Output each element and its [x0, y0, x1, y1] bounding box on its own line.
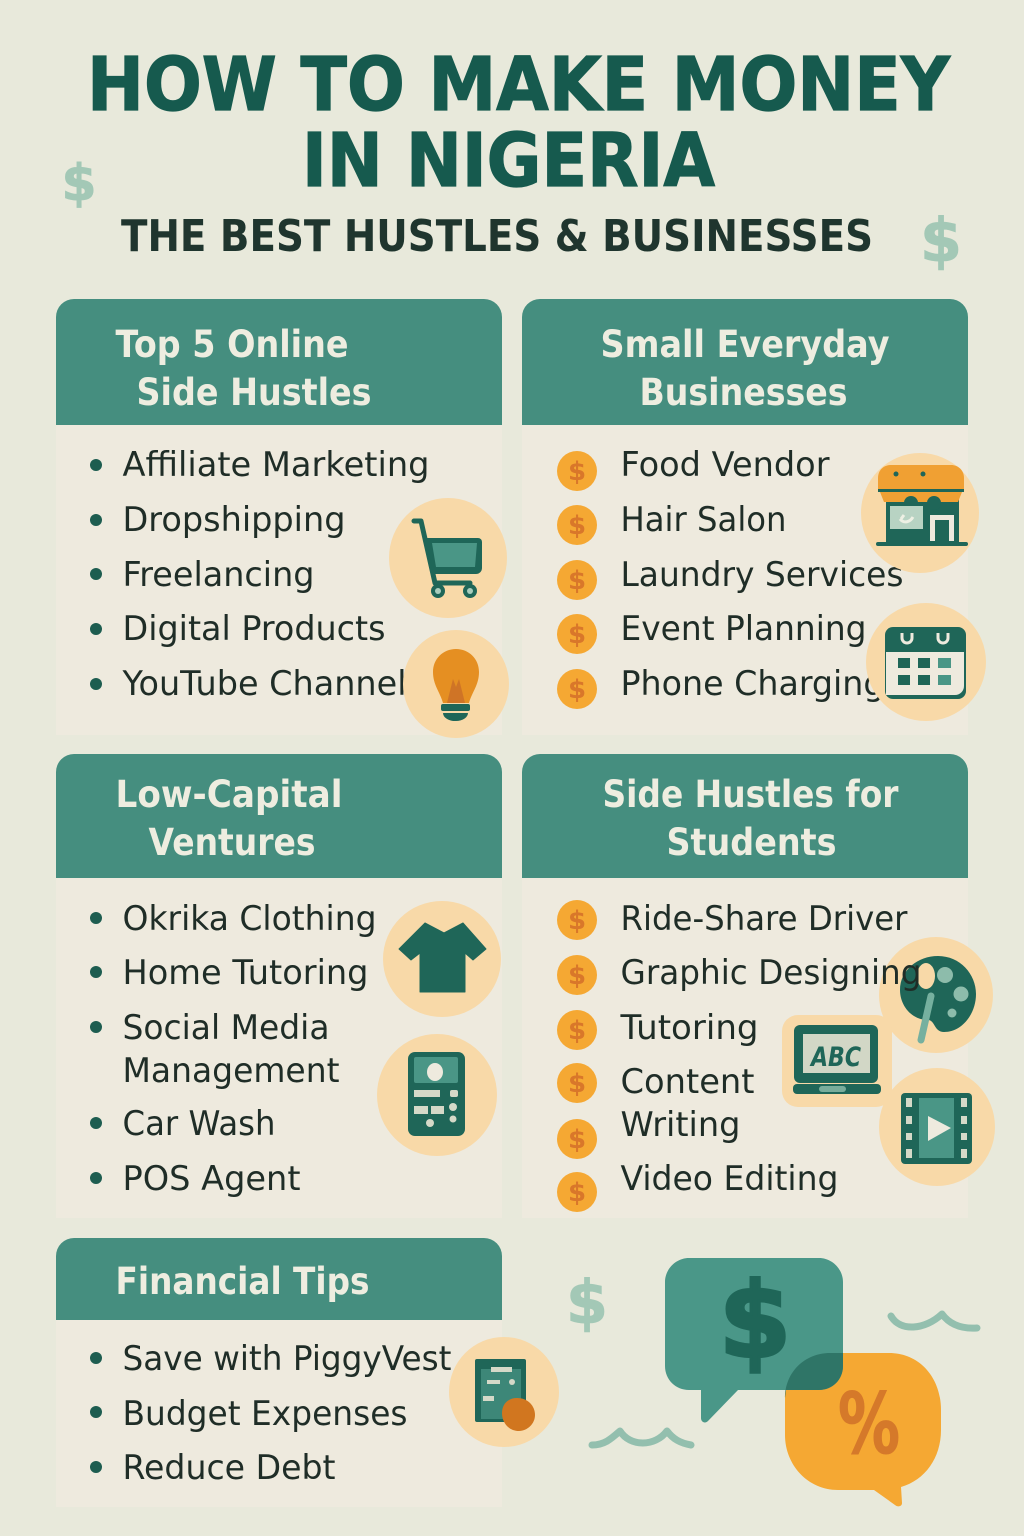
list: low-capital ventures [90, 899, 376, 1199]
decorative dollar sign right: $ [920, 206, 962, 276]
speech bubble: percent: % [838, 1375, 900, 1473]
panel: low-capital ventures [56, 754, 502, 1218]
list: student side hustles: Content [620, 1062, 754, 1102]
list: student side hustles: $ [568, 1016, 586, 1046]
speech bubble: percent [785, 1353, 941, 1506]
heading: small everyday businesses: Small Everyday [600, 323, 890, 366]
heading: side hustles for students: Side Hustles for [602, 773, 899, 816]
speech bubble: dollar [665, 1258, 843, 1422]
list: low-capital ventures: Management [122, 1051, 340, 1091]
heading: side hustles for students: Students [666, 821, 836, 864]
panel: small everyday businesses [522, 299, 986, 735]
heading: low-capital ventures: Ventures [148, 821, 316, 864]
list: student side hustles: $ [568, 906, 586, 936]
icon: POS device [377, 1034, 497, 1156]
icon: budget sheet and coin [449, 1337, 559, 1447]
heading: top 5 online side hustles [56, 299, 502, 425]
list: student side hustles: $ [568, 961, 586, 991]
list: everyday businesses: $ [568, 566, 586, 596]
icon: film play [879, 1068, 995, 1186]
heading: small everyday businesses [522, 299, 968, 425]
decorative dollar sign bottom: $ [566, 1268, 608, 1338]
icon: t-shirt [383, 901, 501, 1017]
list: online side hustles: Freelancing [122, 555, 314, 595]
list: online side hustles: Affiliate Marketing [122, 445, 430, 485]
heading: side hustles for students [522, 754, 968, 878]
speech bubble: dollar: $ [719, 1260, 791, 1382]
list: everyday businesses: $ [568, 457, 586, 487]
panel: side hustles for students [522, 754, 995, 1218]
icon: storefront [861, 453, 979, 573]
title: HOW TO MAKE MONEY [87, 42, 951, 128]
list: online side hustles: YouTube Channel [122, 664, 407, 704]
heading: small everyday businesses: Businesses [640, 371, 848, 414]
list: financial tips: Budget Expenses [122, 1394, 408, 1434]
icon: laptop ABC: ABC [809, 1042, 861, 1073]
list: everyday businesses: Event Planning [620, 609, 866, 649]
list: student side hustles: $ [568, 1069, 586, 1099]
icon: calendar [866, 603, 986, 721]
list: low-capital ventures: Home Tutoring [122, 953, 368, 993]
decorative dollar sign left: $ [62, 154, 96, 212]
list: student side hustles: Tutoring [619, 1008, 758, 1048]
list: low-capital ventures: Social Media [122, 1008, 330, 1048]
title: IN NIGERIA [302, 118, 715, 204]
icon: laptop ABC [782, 1015, 892, 1107]
panel: financial tips [56, 1238, 559, 1507]
decorative wave left [592, 1431, 691, 1445]
list: everyday businesses: Phone Charging [620, 664, 884, 704]
list: everyday businesses: Hair Salon [620, 500, 786, 540]
list: student side hustles: $ [568, 1125, 586, 1155]
heading: top 5 online side hustles: Side Hustles [136, 371, 372, 414]
list: low-capital ventures: Car Wash [122, 1104, 276, 1144]
list: online side hustles: Dropshipping [122, 500, 346, 540]
list: student side hustles: Ride-Share Driver [620, 899, 908, 939]
list: everyday businesses: $ [568, 675, 586, 705]
list: online side hustles: Digital Products [122, 609, 386, 649]
list: low-capital ventures: Okrika Clothing [122, 899, 376, 939]
panel: top 5 online side hustles [56, 299, 509, 738]
list: financial tips: Reduce Debt [122, 1448, 336, 1488]
decorative wave right [891, 1314, 977, 1328]
heading: top 5 online side hustles: Top 5 Online [116, 323, 348, 366]
icon: paint palette [879, 937, 993, 1053]
list: student side hustles [557, 899, 922, 1212]
list: everyday businesses: Food Vendor [620, 445, 830, 485]
heading: financial tips [56, 1238, 502, 1320]
icon: shopping cart [389, 498, 507, 618]
icon: light bulb [403, 630, 509, 738]
list: student side hustles: Graphic Designing [620, 953, 922, 993]
heading: financial tips: Financial Tips [116, 1260, 370, 1303]
heading: low-capital ventures: Low-Capital [116, 773, 342, 816]
list: everyday businesses: Laundry Services [620, 555, 904, 595]
list: everyday businesses: $ [568, 620, 586, 650]
list: student side hustles: $ [568, 1178, 586, 1208]
list: online side hustles [90, 445, 430, 704]
list: everyday businesses [557, 445, 904, 709]
subtitle: THE BEST HUSTLES & BUSINESSES [121, 211, 873, 262]
heading: low-capital ventures [56, 754, 502, 878]
list: low-capital ventures: POS Agent [122, 1159, 300, 1199]
list: student side hustles: Video Editing [620, 1159, 838, 1199]
list: financial tips: Save with PiggyVest [122, 1339, 452, 1379]
list: student side hustles: Writing [620, 1105, 740, 1145]
list: financial tips [90, 1339, 452, 1488]
list: everyday businesses: $ [568, 511, 586, 541]
title [87, 42, 951, 204]
